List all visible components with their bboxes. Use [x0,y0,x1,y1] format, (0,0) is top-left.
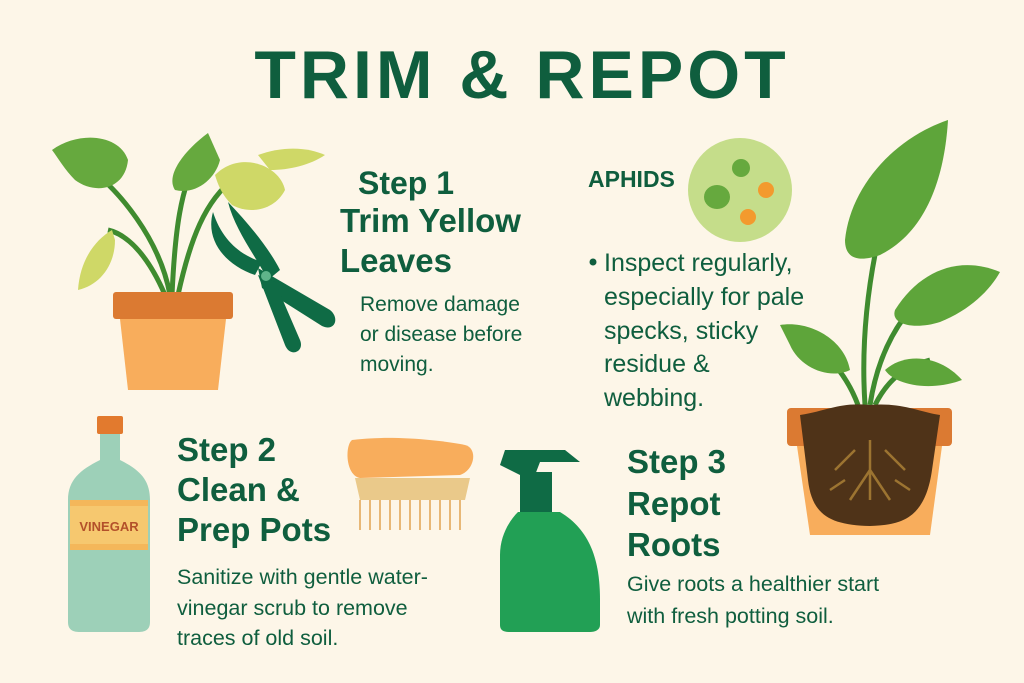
icon: repotted plant with roots [780,120,1000,535]
text: step 1: Step 1 [358,165,454,201]
icon: plant with yellow leaves in pot [52,133,325,390]
text: aphids heading: APHIDS [588,166,675,192]
icon: vinegar bottle [68,416,150,632]
text: step 3: Give roots a healthier start [627,572,879,596]
icon: vinegar bottle: VINEGAR [79,519,139,534]
text: step 3: Step 3 [627,443,726,480]
title: TRIM & REPOT [254,37,790,113]
text: aphid bullet: residue & [604,350,710,378]
icon: scrub brush [347,438,473,530]
text: step 2: Step 2 [177,431,276,468]
icon: pruning shears [211,202,335,352]
text: step 3 [626,443,879,628]
icon: spray bottle [500,450,600,632]
text: aphid bullet: specks, sticky [604,317,759,345]
icon: aphids circle [688,138,792,242]
text: step 2: vinegar scrub to remove [177,596,408,620]
text: step 1: Remove damage [360,293,520,316]
text: step 1 [340,165,522,376]
text: step 3: Roots [627,526,720,563]
text: aphid bullet: especially for pale [604,283,804,311]
text: step 2: Clean & [177,471,300,508]
text: step 3: Repot [627,485,720,522]
text: step 1: or disease before [360,323,522,346]
text: step 2: traces of old soil. [177,626,338,650]
text: step 1: Trim Yellow [340,202,521,239]
text: aphid bullet [590,249,804,412]
text: step 1: moving. [360,353,434,376]
text: step 2: Prep Pots [177,511,331,548]
text: step 1: Leaves [340,242,452,279]
text: aphid bullet: webbing. [603,384,704,412]
text: step 2 [177,431,428,650]
text: step 2: Sanitize with gentle water- [177,565,428,589]
text: aphid bullet: Inspect regularly, [604,249,793,277]
text: step 3: with fresh potting soil. [626,604,834,628]
